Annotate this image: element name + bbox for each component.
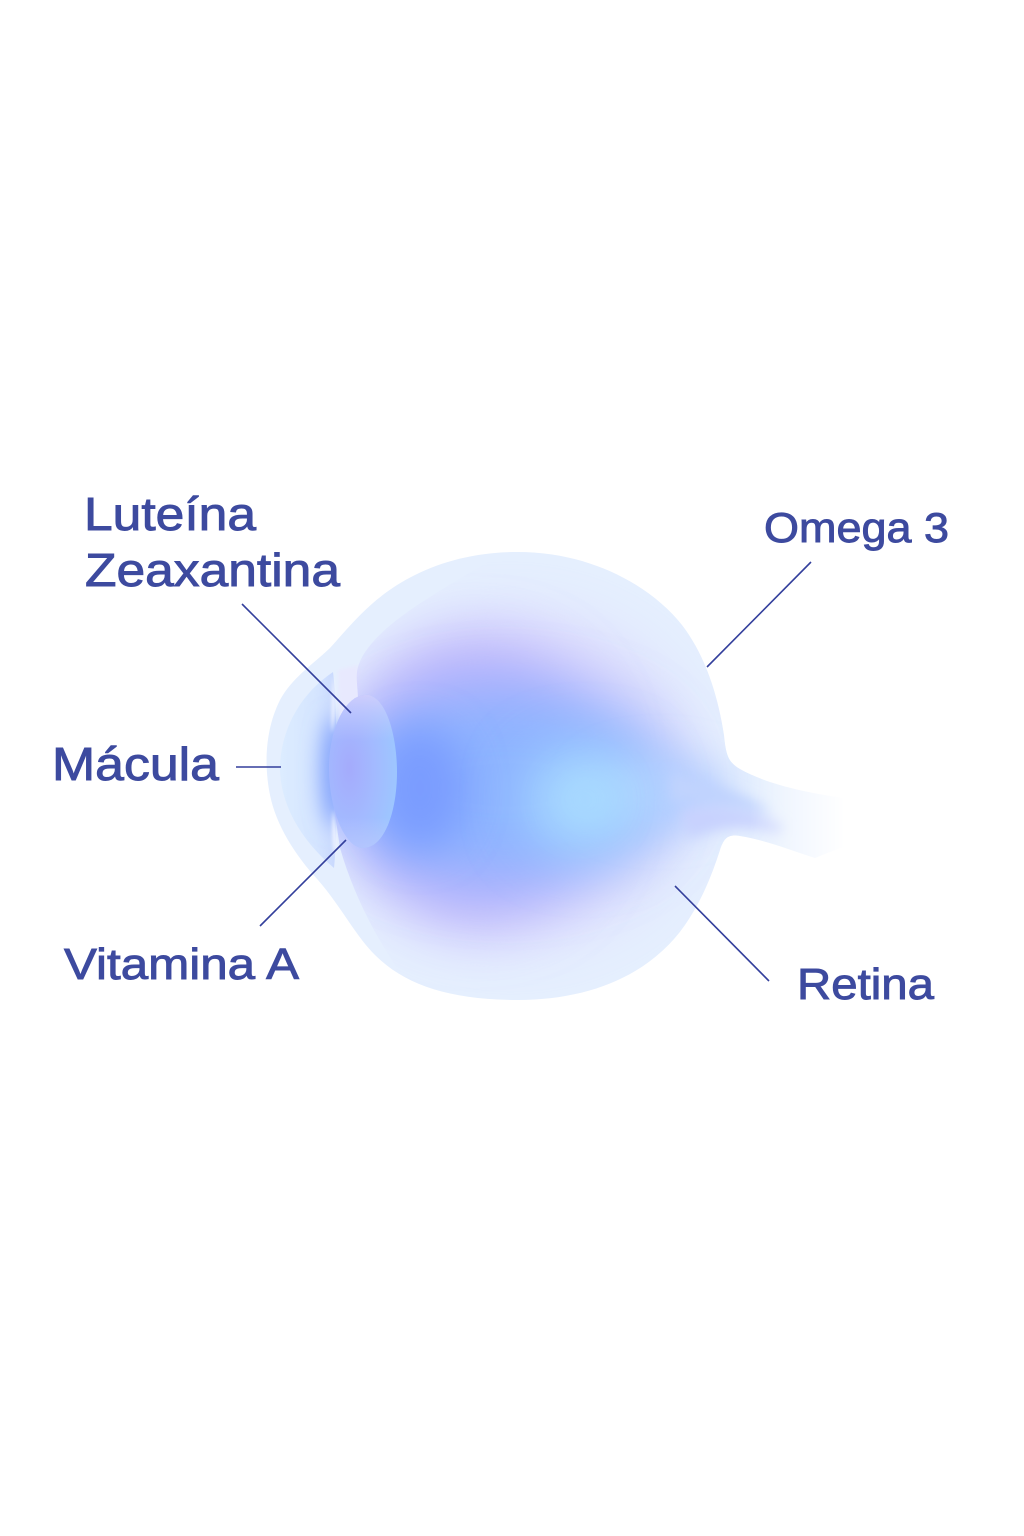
- label: Luteína Zeaxantina: [84, 488, 340, 596]
- label: Luteína Zeaxantina: Luteína: [84, 488, 256, 540]
- vitreous chamber with soft colour glow: [330, 620, 730, 936]
- label: Vitamina A: Vitamina A: [64, 940, 300, 989]
- lilac halo: [330, 620, 690, 936]
- leader: Omega 3: [707, 562, 811, 667]
- lens-side saturated blue: [375, 726, 465, 850]
- aqueous blue glow behind cornea: [322, 717, 348, 827]
- blue core: [340, 690, 670, 880]
- infographic: eye anatomy and nutrients: [56, 495, 948, 1000]
- nerve-side blue extension: [590, 760, 730, 824]
- pale centre glow: [525, 750, 645, 850]
- lens: [329, 695, 397, 848]
- eyeball illustration: [266, 552, 811, 1000]
- label: Retina: Retina: [797, 960, 935, 1009]
- leader: Retina: [675, 886, 769, 981]
- iris slivers: [332, 676, 337, 856]
- cornea inner chamber: [280, 672, 337, 868]
- leader: Mácula: [236, 766, 281, 768]
- leader: Luteína Zeaxantina: [242, 604, 351, 713]
- pale lilac zone around the lens: [339, 708, 344, 718]
- label: Omega 3: Omega 3: [764, 504, 949, 551]
- leader: Vitamina A: [260, 840, 346, 926]
- label: Luteína Zeaxantina: Zeaxantina: [85, 544, 340, 596]
- leader lines: [236, 562, 811, 981]
- optic nerve fibres: [672, 780, 780, 834]
- sclera outer shell: [266, 552, 811, 1000]
- label: Mácula: Mácula: [52, 738, 219, 790]
